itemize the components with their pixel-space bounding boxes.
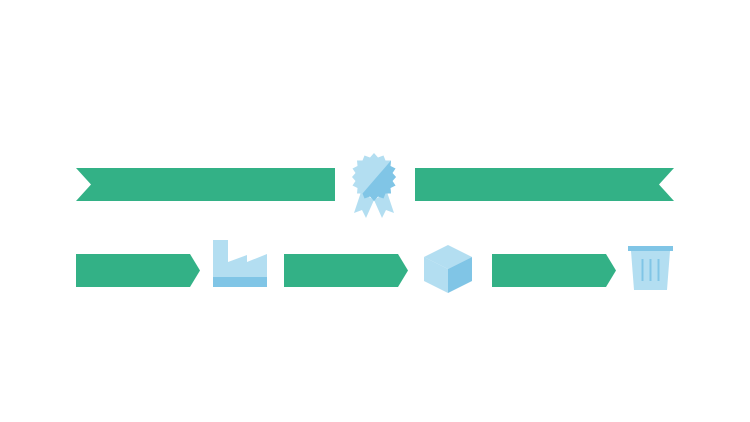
banner: right ribbon [415,168,674,201]
icon: award badge [352,153,396,218]
arrow 1 [76,254,200,287]
icon: cube [424,245,472,293]
banner: left ribbon [76,168,335,201]
icon: trash bin [628,246,673,290]
arrow 3 [492,254,616,287]
icon: factory [213,240,267,287]
arrow 2 [284,254,408,287]
